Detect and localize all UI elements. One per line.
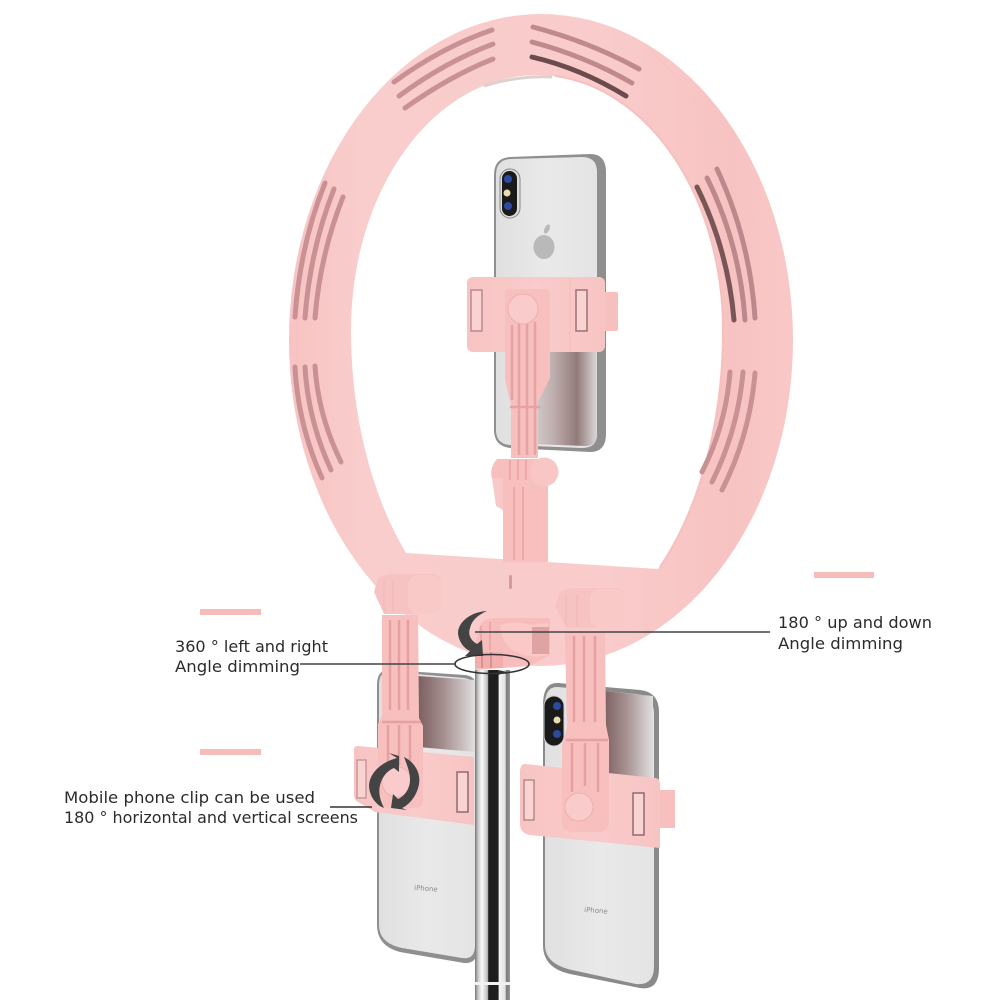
label: mobile phone clip: 180 ° horizontal and vertical screens bbox=[64, 808, 358, 827]
label: 360 degree left and right: 360 ° left and right bbox=[175, 637, 328, 656]
left hinge bbox=[374, 574, 441, 614]
left phone: iPhone bbox=[414, 884, 438, 894]
metal pole bbox=[475, 670, 510, 1000]
vent slots: top left bbox=[394, 30, 493, 108]
top phone clip bbox=[467, 277, 618, 562]
center pivot joint bbox=[475, 618, 550, 670]
vent slots: lower right bbox=[702, 372, 755, 490]
label: 180 degree up and down: Angle dimming bbox=[778, 634, 903, 653]
vent slots: lower left bbox=[295, 366, 341, 478]
right phone: iPhone bbox=[584, 906, 608, 916]
label: 180 degree up and down: 180 ° up and down bbox=[778, 613, 932, 632]
accent bar: left lower bbox=[200, 749, 261, 755]
right clip arm bbox=[562, 632, 609, 832]
right hinge bbox=[555, 588, 625, 628]
top phone arm bbox=[505, 289, 550, 458]
right phone clip bbox=[520, 764, 675, 848]
camera module bbox=[500, 169, 520, 218]
left clip arm bbox=[378, 615, 423, 808]
apple logo bbox=[534, 223, 554, 259]
rotate arrows on left clip bbox=[369, 753, 419, 810]
accent bar: right bbox=[814, 572, 874, 578]
shadow under top clip bbox=[530, 350, 597, 446]
light ring body bbox=[289, 14, 793, 666]
top phone bbox=[494, 154, 606, 452]
vent slots: upper right bbox=[697, 169, 755, 320]
label: 360 degree left and right: Angle dimming bbox=[175, 657, 300, 676]
left phone bbox=[377, 670, 477, 963]
vent slots: upper left bbox=[295, 183, 343, 318]
right phone camera bbox=[544, 696, 564, 746]
indicator slot bbox=[509, 575, 512, 589]
outer rim edge bbox=[650, 50, 755, 225]
left phone clip bbox=[354, 746, 474, 825]
inner rim shade bbox=[555, 76, 723, 567]
accent bar: left upper bbox=[200, 609, 261, 615]
leader line: 360 degree bbox=[300, 663, 456, 665]
right phone bbox=[543, 683, 659, 988]
label: mobile phone clip: Mobile phone clip can be used bbox=[64, 788, 315, 807]
top phone connector bbox=[491, 458, 558, 562]
rotation ring: 360 degree left and right bbox=[455, 654, 529, 675]
leader line: phone clip bbox=[330, 806, 372, 808]
vent slots: top right bbox=[532, 27, 639, 96]
rotation arrow: 180 degree up and down bbox=[458, 611, 487, 656]
hole top highlight bbox=[484, 77, 552, 86]
leader line: 180 degree bbox=[475, 631, 770, 633]
